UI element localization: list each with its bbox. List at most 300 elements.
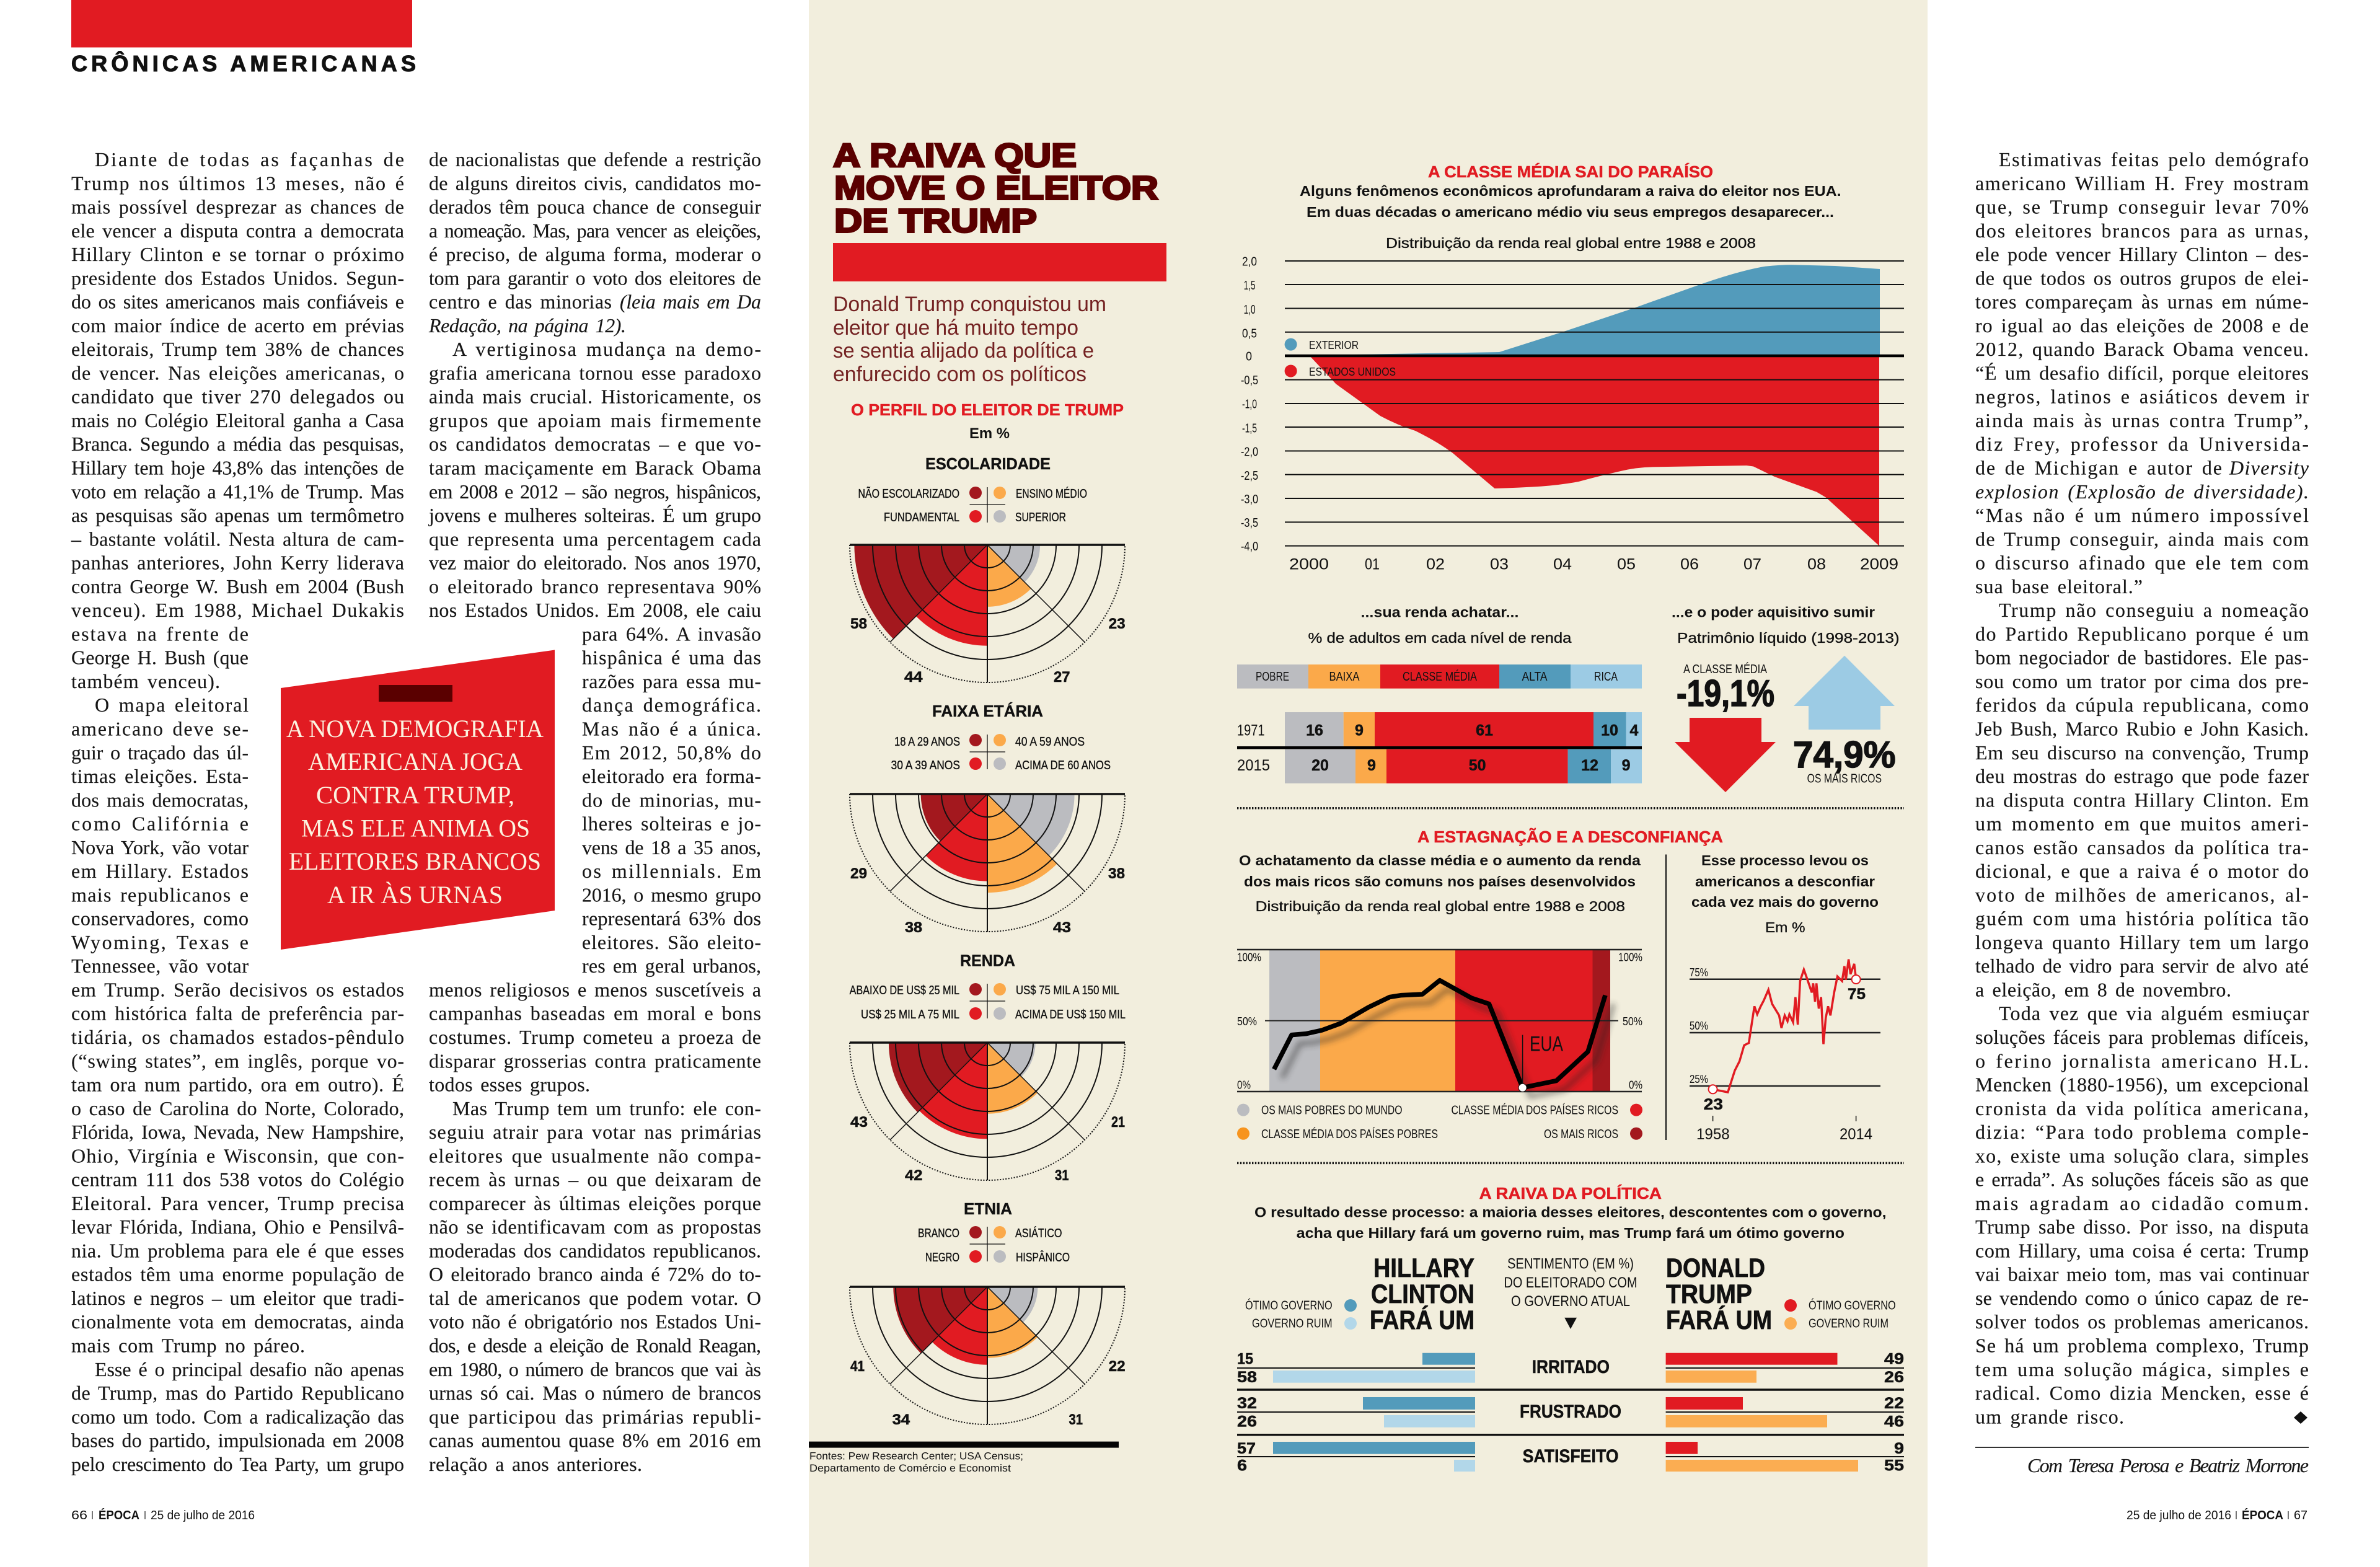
text block: second column: recem às urnas – ou que deixaram de	[429, 1168, 761, 1191]
text block: left column: latinos e negros – um eleitor que tradi-	[71, 1287, 404, 1309]
text block: left column: venceu). Em 1988, Michael Dukakis	[71, 599, 404, 621]
arrow: down	[1675, 718, 1776, 792]
text block: second column: vens de 18 a 35 anos,	[582, 836, 761, 859]
chart: renda: RENDA	[960, 951, 1015, 969]
heading: ...e o poder aquisitivo sumir	[1672, 604, 1875, 620]
text block: second column: (leia mais em Da	[620, 291, 761, 313]
area chart: 04	[1553, 556, 1572, 573]
text block: right column: de Trump conseguir, ainda mais com	[1975, 527, 2309, 550]
text block: second column: res em geral urbanos,	[582, 955, 761, 977]
area chart: -1,5	[1242, 422, 1257, 436]
text block: second column: centro e das minorias	[429, 291, 612, 313]
icon: end-of-text diamond	[2294, 1411, 2307, 1424]
credit: Com Teresa Perosa e Beatriz Morrone	[2027, 1454, 2309, 1477]
chart: escolaridade: 58	[850, 616, 867, 632]
bar chart: sentimento: 26	[1237, 1413, 1257, 1431]
text block: right column: xo, existe uma solução clara, simples	[1975, 1144, 2309, 1167]
intro text right: americanos a desconfiar	[1695, 873, 1875, 889]
center label	[1504, 1256, 1637, 1329]
bar chart: sentimento: SATISFEITO	[1523, 1446, 1619, 1467]
text block: right column: cronista da vida política americana,	[1975, 1097, 2309, 1119]
text block: right column: telhado de vidro para servir de alvo até	[1975, 955, 2309, 977]
label: os mais ricos: OS MAIS RICOS	[1807, 772, 1882, 786]
text block: right column: dos eleitores brancos para as urnas,	[1975, 219, 2309, 242]
bar chart: sentimento: 26	[1884, 1369, 1904, 1386]
text block: left column: Diante de todas as façanhas de	[95, 148, 404, 170]
text block: left column: estava na frente de	[71, 622, 249, 645]
value: 74,9%: 74,9%	[1793, 734, 1896, 775]
chart: renda: 21	[1111, 1114, 1125, 1131]
callout: pull quote: CONTRA TRUMP,	[316, 781, 514, 809]
text block: second column: tom para garantir o voto dos eleitores de	[429, 267, 761, 289]
callout: pull quote: A IR ÀS URNAS	[327, 881, 503, 909]
text block: second column: não se identificavam com as propostas	[429, 1216, 761, 1238]
text block: second column: de alguns direitos civis, candidatos mo-	[429, 172, 761, 194]
source bar	[809, 1442, 1119, 1448]
text block: left column: cionalmente vota em democratas, ainda	[71, 1310, 404, 1333]
chart: etnia: NEGRO	[925, 1251, 959, 1265]
footer: left page	[71, 1508, 255, 1522]
text block: second column: grupos que apoiam mais firmemente	[429, 409, 761, 431]
text block: right column: Trump não conseguiu a nomeação	[1999, 599, 2309, 621]
section tag: red block	[71, 0, 412, 47]
elephant chart: 50%	[1237, 1015, 1257, 1028]
stacked bars: 50	[1469, 757, 1486, 774]
text block: right column: dizia: “Para todo problema comple-	[1975, 1121, 2309, 1143]
title: MOVE O ELEITOR	[834, 170, 1158, 207]
candidate header: Trump	[1666, 1253, 1772, 1335]
bar chart: sentimento: 15	[1237, 1351, 1253, 1368]
text block: right column: de de Michigan e autor de	[1975, 456, 2222, 479]
intro text	[1300, 183, 1841, 220]
area chart: 03	[1490, 556, 1509, 573]
subtitle: % de adultos em cada nível de renda	[1308, 630, 1572, 646]
chart: renda	[850, 951, 1126, 1184]
text block: right column: Estimativas feitas pelo demógrafo	[1999, 148, 2309, 170]
subtitle: Patrimônio líquido (1998-2013)	[1677, 630, 1900, 646]
text block: second column: eleitores. São eleito-	[582, 931, 761, 953]
text block: right column: e errada”. As soluções fáceis são as que	[1975, 1168, 2309, 1191]
legend: CLASSE MÉDIA DOS PAÍSES RICOS	[1452, 1103, 1618, 1118]
text block: left column: bases do partido, impulsionada em 2008	[71, 1429, 404, 1452]
text block: left column: O mapa eleitoral	[95, 694, 249, 716]
text block: second column: A vertiginosa mudança na demo-	[452, 338, 761, 360]
text block: second column: comparecer às últimas eleições porque	[429, 1192, 761, 1214]
text block: right column: sou como um trator por cima dos pre-	[1975, 670, 2309, 692]
chart: faixa etária: 18 A 29 ANOS	[894, 735, 960, 749]
text block: second column: moderadas dos candidatos republicanos.	[429, 1239, 761, 1261]
footer: left page: 25 de julho de 2016	[151, 1509, 255, 1522]
text block: left column: com histórica falta de preferência par-	[71, 1002, 404, 1025]
stacked bars: 20	[1311, 757, 1329, 774]
callout: pull quote: A NOVA DEMOGRAFIA	[286, 715, 544, 743]
stacked bars: 9	[1622, 757, 1631, 774]
chart: etnia: 34	[892, 1411, 910, 1428]
intro text	[1254, 1204, 1887, 1241]
chart: renda: 42	[905, 1167, 922, 1184]
elephant chart: 100%	[1618, 951, 1642, 963]
legend: CLASSE MÉDIA DOS PAÍSES POBRES	[1261, 1127, 1438, 1141]
area chart: 07	[1743, 556, 1761, 573]
intro text right: Em %	[1765, 919, 1805, 935]
text block: right column: um grande risco.	[1975, 1405, 2124, 1428]
text block: left column: Ohio, Virgínia e Wisconsin, que con-	[71, 1144, 404, 1167]
text block: second column: que participou das primárias republi-	[429, 1405, 761, 1428]
text block: right column: tores compareçam às urnas em núme-	[1975, 291, 2309, 313]
chart: etnia: 31	[1069, 1411, 1083, 1428]
text block: left column: também venceu).	[71, 670, 220, 692]
stacked bars: 9	[1355, 722, 1364, 739]
text block: second column: em 2008 e 2012 – são negros, hispânicos,	[429, 480, 761, 503]
text block: right column: de que todos os outros grupos de elei-	[1975, 267, 2309, 289]
text block: left column: mais republicanos e	[71, 883, 249, 906]
chart: faixa etária: 43	[1053, 919, 1071, 936]
text block: second column: derados têm pouca chance de conseguir	[429, 196, 761, 218]
text block: left column: estados têm uma enorme população de	[71, 1263, 404, 1286]
arrow: up	[1794, 656, 1895, 730]
line chart: desconfiança: 75%	[1690, 966, 1708, 979]
text block: right column: dicional, e que a raiva é o motor do	[1975, 860, 2309, 882]
text block: second column: lheres solteiras e jo-	[582, 813, 761, 835]
unit label: Em %	[969, 425, 1010, 442]
text block: second column: jovens e mulheres solteiras. É um grupo	[428, 504, 761, 526]
elephant chart	[1237, 950, 1642, 1097]
panel: a raiva da política	[1237, 1184, 1904, 1475]
chart: escolaridade: 23	[1109, 616, 1126, 632]
text block: left column: eleitorais, Trump tem 38% de chances	[71, 338, 404, 360]
text block: second column: Mas não é a única.	[582, 718, 761, 740]
candidate header: Hillary	[1370, 1253, 1474, 1335]
text block: left column: Flórida, Iowa, Nevada, New Hampshire,	[71, 1121, 404, 1143]
elephant chart: 100%	[1237, 951, 1261, 963]
candidate header: Trump: FARÁ UM	[1666, 1305, 1772, 1335]
subtitle: eleitor que há muito tempo	[833, 316, 1078, 340]
legend bar: BAIXA	[1329, 670, 1360, 684]
value: -19,1%: -19,1%	[1677, 673, 1774, 714]
heading: A CLASSE MÉDIA SAI DO PARAÍSO	[1428, 162, 1713, 181]
section heading: CRÔNICAS AMERICANAS	[71, 50, 416, 76]
area chart: 2009	[1860, 556, 1898, 573]
area chart: -3,0	[1241, 493, 1258, 506]
area chart: 02	[1426, 556, 1445, 573]
intro text left	[1239, 852, 1641, 889]
panel: sua renda achatar	[1237, 604, 1642, 784]
chart: faixa etária: FAIXA ETÁRIA	[932, 702, 1043, 720]
text block: left column: levar Flórida, Indiana, Ohio e Pensilvâ-	[71, 1216, 404, 1238]
text block: second column: os candidatos democratas – e que vo-	[429, 433, 761, 455]
text block: second column: hispânica é uma das	[582, 647, 761, 669]
divider	[1665, 854, 1667, 1140]
text block: left column: George H. Bush (que	[71, 647, 249, 669]
stacked bars: 61	[1476, 722, 1493, 739]
chart: faixa etária: 38	[1108, 865, 1125, 882]
chart: etnia: ASIÁTICO	[1015, 1226, 1062, 1240]
text block: left column: em Hillary. Estados	[71, 860, 249, 882]
chart: faixa etária	[850, 702, 1125, 936]
text block: left column: tidária, os chamados estados-pêndulo	[71, 1026, 404, 1048]
area chart: -3,5	[1241, 516, 1258, 530]
text block: second column: é preciso, de alguma forma, moderar o	[429, 243, 761, 265]
text block: left column: Esse é o principal desafio não apenas	[95, 1358, 404, 1380]
text block: left column: mais no Colégio Eleitoral ganha a Casa	[71, 409, 404, 431]
text block: second column: de nacionalistas que defende a restrição	[429, 148, 761, 170]
text block: left column: centram 111 dos 538 votos do Colégio	[71, 1168, 404, 1191]
line chart: desconfiança: 25%	[1690, 1073, 1708, 1085]
chart subtitle: Distribuição da renda real global entre 1988 e 2008	[1386, 235, 1756, 251]
text block: second column: dança demográfica.	[582, 694, 761, 716]
red title bar	[833, 243, 1166, 281]
chart: renda: 31	[1055, 1167, 1069, 1184]
text block: right column: Em seu discurso na convenção, Trump	[1975, 741, 2309, 764]
chart: faixa etária: 29	[850, 865, 867, 882]
chart: escolaridade: NÃO ESCOLARIZADO	[858, 486, 959, 501]
text block: left column: do os sites americanos mais confiáveis e	[71, 291, 404, 313]
text block: second column: que representa uma percentagem cada	[429, 527, 761, 550]
elephant chart: 50%	[1623, 1015, 1642, 1028]
panel: infographic background	[809, 0, 1928, 1567]
text block: second column: seguiu atrair para votar nas primárias	[429, 1121, 761, 1143]
chart: etnia: BRANCO	[918, 1227, 959, 1240]
area chart: 1,5	[1244, 279, 1256, 293]
chart: renda: ACIMA DE US$ 150 MIL	[1015, 1008, 1126, 1022]
bar chart: sentimento: 46	[1884, 1413, 1904, 1431]
chart: escolaridade: 44	[904, 669, 923, 686]
line chart: desconfiança: 50%	[1690, 1020, 1708, 1032]
intro text right: Esse processo levou os	[1701, 852, 1869, 868]
chart: escolaridade: SUPERIOR	[1015, 511, 1066, 524]
text block: left column: de Trump, mas do Partido Republicano	[71, 1382, 404, 1404]
text block: right column: negros, latinos e asiáticos devem ir	[1975, 386, 2309, 408]
text block: second column: dos, e desde a eleição de Ronald Reagan,	[429, 1334, 761, 1356]
text block: right column: ro igual ao das eleições de 2008 e de	[1975, 314, 2309, 337]
text block: second column: os millennials. Em	[582, 860, 761, 882]
area chart	[1241, 255, 1904, 573]
text block: left column: em Trump. Serão decisivos os estados	[71, 978, 404, 1000]
text block: right column: ele pode vencer Hillary Clinton – des-	[1975, 243, 2309, 265]
text block: left column: nia. Um problema para ele é que esses	[71, 1239, 404, 1261]
area chart: 1,0	[1244, 303, 1256, 317]
candidate header: Trump: DONALD	[1666, 1253, 1765, 1283]
text block: second column: tal de americanos que podem votar. O	[429, 1287, 761, 1309]
chart: escolaridade	[850, 454, 1126, 686]
legend: Hillary: GOVERNO RUIM	[1252, 1317, 1333, 1331]
text block: right column: deu mostras do estrago que pode fazer	[1975, 765, 2309, 787]
candidate header: Hillary: CLINTON	[1371, 1279, 1474, 1309]
stacked bars: 10	[1601, 722, 1618, 739]
legend: OS MAIS POBRES DO MUNDO	[1261, 1104, 1402, 1118]
text block: second column: nos Estados Unidos. Em 2008, ele caiu	[429, 599, 761, 621]
text block: left column: Wyoming, Texas e	[71, 931, 249, 953]
bar chart: sentimento: 58	[1237, 1369, 1257, 1386]
text block: right column: Se há um problema complexo, Trump	[1975, 1334, 2309, 1356]
text block: left column: Hillary Clinton e se tornar o próximo	[71, 243, 404, 265]
bar chart: sentimento: IRRITADO	[1532, 1357, 1610, 1377]
heading: perfil: O PERFIL DO ELEITOR DE TRUMP	[851, 400, 1124, 419]
area chart: 2,0	[1242, 255, 1257, 268]
text block: right column: “Mas não é um número impossível	[1975, 504, 2309, 526]
text block: left column: americano deve se-	[71, 718, 249, 740]
text block: right column: mais agradam ao cidadão comum.	[1975, 1192, 2309, 1214]
center label: O GOVERNO ATUAL	[1511, 1293, 1630, 1310]
legend: Trump: ÓTIMO GOVERNO	[1809, 1299, 1896, 1313]
chart: faixa etária: 40 A 59 ANOS	[1015, 735, 1085, 749]
text block: right column: soluções fáceis para problemas difíceis,	[1975, 1026, 2309, 1048]
text block: left column: panhas anteriores, John Kerry liderava	[71, 552, 404, 574]
area chart: -0,5	[1241, 374, 1258, 387]
text block: left column: Branca. Segundo a média das pesquisas,	[71, 433, 404, 455]
text block: second column: disparar grosserias contra praticamente	[429, 1049, 761, 1072]
legend bar: CLASSE MÉDIA	[1403, 669, 1478, 684]
text block: left column: ele vencer a disputa contra a democrata	[71, 219, 404, 242]
text block: right column: americano William H. Frey mostram	[1975, 172, 2309, 194]
text block: right column: diz Frey, professor da Universida-	[1975, 433, 2309, 455]
text block: second column: relação a anos anteriores.	[429, 1453, 642, 1475]
footer: right page: ÉPOCA	[2242, 1508, 2283, 1522]
bar chart: sentimento: 22	[1884, 1395, 1904, 1412]
line chart: desconfiança: 1958	[1696, 1126, 1730, 1143]
text block: second column: para 64%. A invasão	[582, 622, 761, 645]
text block: right column: vai baixar meio tom, mas vai continuar	[1975, 1263, 2309, 1286]
bar chart: sentimento: 49	[1884, 1351, 1904, 1368]
chart: escolaridade: FUNDAMENTAL	[884, 511, 959, 524]
chart: faixa etária: 38	[905, 919, 922, 936]
subtitle	[833, 293, 1106, 386]
text block: second column: o eleitorado branco representava 90%	[429, 575, 761, 598]
area chart: 05	[1617, 556, 1636, 573]
text block: left column: – bastante volátil. Nesta altura de cam-	[71, 527, 404, 550]
text block: second column: eleitorado era forma-	[582, 765, 761, 787]
text block: right column: o ferino jornalista americano H.L.	[1975, 1049, 2309, 1072]
text block: left column: conservadores, como	[71, 907, 249, 930]
text block: second column: em 1980, o número de brancos que vai às	[429, 1358, 761, 1380]
legend bar	[1237, 664, 1642, 689]
intro text: Em duas décadas o americano médio viu seus empregos desaparecer...	[1307, 204, 1834, 220]
chart: etnia: ETNIA	[964, 1199, 1012, 1218]
line chart: desconfiança: 75	[1848, 986, 1866, 1003]
text block: left column: as pesquisas são apenas um termômetro	[71, 504, 404, 526]
line chart: desconfiança: 23	[1704, 1096, 1723, 1113]
legend	[1237, 1103, 1642, 1141]
callout: pull quote	[281, 650, 555, 950]
candidate header: Hillary: HILLARY	[1373, 1253, 1474, 1283]
text block: second column: todos esses grupos.	[429, 1074, 590, 1096]
bar chart: sentimento	[1237, 1351, 1904, 1475]
text block: second column: taram maciçamente em Barack Obama	[429, 456, 761, 479]
text block: right column: Jeb Bush, Marco Rubio e John Kasich.	[1975, 718, 2309, 740]
text block: second column: ainda mais crucial. Historicamente, os	[429, 386, 761, 408]
text block: right column: sua base eleitoral.”	[1975, 575, 2143, 598]
area chart: -2,5	[1241, 469, 1258, 483]
footer: left page: ÉPOCA	[99, 1508, 139, 1522]
text block: left column: timas eleições. Esta-	[71, 765, 249, 787]
heading: A RAIVA DA POLÍTICA	[1479, 1184, 1662, 1203]
area chart: 01	[1365, 556, 1380, 573]
text block: left column: presidente dos Estados Unidos. Segun-	[71, 267, 404, 289]
elephant chart: EUA	[1530, 1033, 1563, 1056]
title: DE TRUMP	[834, 202, 1037, 239]
text block: second column: 2016, o mesmo grupo	[582, 883, 761, 906]
intro text: O resultado desse processo: a maioria desses eleitores, descontentes com o governo,	[1254, 1204, 1887, 1220]
text block: left column: Trump nos últimos 13 meses, não é	[71, 172, 404, 194]
text block: left column: com maior índice de acerto em prévias	[71, 314, 404, 337]
text block: right column	[1975, 148, 2309, 1428]
text block: right column: “É um desafio difícil, porque eleitores	[1975, 361, 2309, 384]
chart: faixa etária: ACIMA DE 60 ANOS	[1015, 759, 1111, 772]
area chart: 0	[1246, 350, 1252, 363]
intro text right: cada vez mais do governo	[1691, 894, 1879, 910]
legend bar: RICA	[1594, 670, 1618, 684]
text block: right column: Mencken (1880-1956), um excepcional	[1975, 1074, 2309, 1096]
legend: OS MAIS RICOS	[1544, 1128, 1618, 1141]
text block: second column: Mas Trump tem um trunfo: ele con-	[452, 1097, 761, 1119]
text block: right column: tem uma solução mágica, simples e	[1975, 1358, 2309, 1380]
text block: second column: Em 2012, 50,8% do	[582, 741, 761, 764]
chart: escolaridade: ESCOLARIDADE	[925, 454, 1051, 473]
text block: second column: vez maior do eleitorado. Nos anos 1970,	[429, 552, 761, 574]
elephant chart: 0%	[1237, 1079, 1251, 1091]
text block: left column: dos mais democratas,	[71, 788, 249, 811]
footer: right page: 25 de julho de 2016	[2127, 1509, 2231, 1522]
text block: right column: longeva quanto Hillary tem um largo	[1975, 931, 2309, 953]
chart: renda: US$ 75 MIL A 150 MIL	[1016, 984, 1119, 997]
center label: SENTIMENTO (EM %)	[1507, 1256, 1634, 1273]
callout: pull quote: AMERICANA JOGA	[308, 748, 522, 775]
footer: right page	[2127, 1508, 2307, 1522]
text block: second column: campanhas baseadas em moral e bons	[429, 1002, 761, 1025]
subtitle: enfurecido com os políticos	[833, 363, 1086, 386]
text block: right column: explosion (Explosão de diversidade).	[1975, 480, 2309, 503]
text block: right column: 2012, quando Barack Obama venceu.	[1975, 338, 2309, 360]
chart subtitle: Distribuição da renda real global entre 1988 e 2008	[1256, 898, 1625, 914]
text block: left column: Hillary tem hoje 43,8% das intenções de	[71, 456, 404, 479]
label: classe média: A CLASSE MÉDIA	[1683, 662, 1768, 676]
text block: right column: Trump sabe disso. Por isso, na disputa	[1975, 1216, 2309, 1238]
stacked bars: 2015	[1237, 757, 1270, 774]
area chart: 08	[1807, 556, 1826, 573]
chart: etnia	[850, 1199, 1126, 1428]
text block: right column: na disputa contra Hillary Clinton. Em	[1975, 788, 2309, 811]
callout: pull quote: MAS ELE ANIMA OS	[301, 814, 530, 842]
title: A RAIVA QUE	[833, 137, 1077, 174]
panel: perfil do eleitor	[850, 400, 1126, 1428]
text block: left column	[71, 148, 404, 1475]
footer: left page: 66	[71, 1509, 87, 1522]
text block: second column: voto não é obrigatório nos Estados Uni-	[429, 1310, 761, 1333]
heading: ...sua renda achatar...	[1361, 604, 1518, 620]
text block: right column: o discurso afinado que ele tem com	[1975, 552, 2309, 574]
chart: renda: US$ 25 MIL A 75 MIL	[861, 1008, 959, 1022]
title	[833, 137, 1158, 239]
area chart: 2000	[1289, 556, 1329, 573]
text block: left column: o caso de Carolina do Norte, Colorado,	[71, 1097, 404, 1119]
text block: left column: candidato que tiver 270 delegados ou	[71, 386, 404, 408]
bar chart: sentimento: FRUSTRADO	[1520, 1401, 1621, 1422]
text block: left column: Tennessee, vão votar	[71, 955, 249, 977]
bar chart: sentimento: 9	[1894, 1440, 1904, 1457]
footer: right page: 67	[2294, 1509, 2307, 1522]
text block: second column: Redação, na página 12).	[428, 314, 626, 337]
intro text right	[1691, 852, 1879, 935]
text block: second column: eleitores que usualmente não compa-	[429, 1144, 761, 1167]
area chart: -2,0	[1241, 445, 1258, 459]
text block: right column: com Hillary, uma coisa é certa: Trump	[1975, 1239, 2309, 1261]
area chart: -4,0	[1241, 540, 1258, 554]
stacked bars: 16	[1306, 722, 1323, 739]
text block: second column: do de minorias, mu-	[582, 788, 761, 811]
bar chart: sentimento: 6	[1237, 1457, 1247, 1475]
intro text: acha que Hillary fará um governo ruim, mas Trump fará um ótimo governo	[1297, 1225, 1844, 1241]
chart: faixa etária: 30 A 39 ANOS	[891, 759, 960, 772]
